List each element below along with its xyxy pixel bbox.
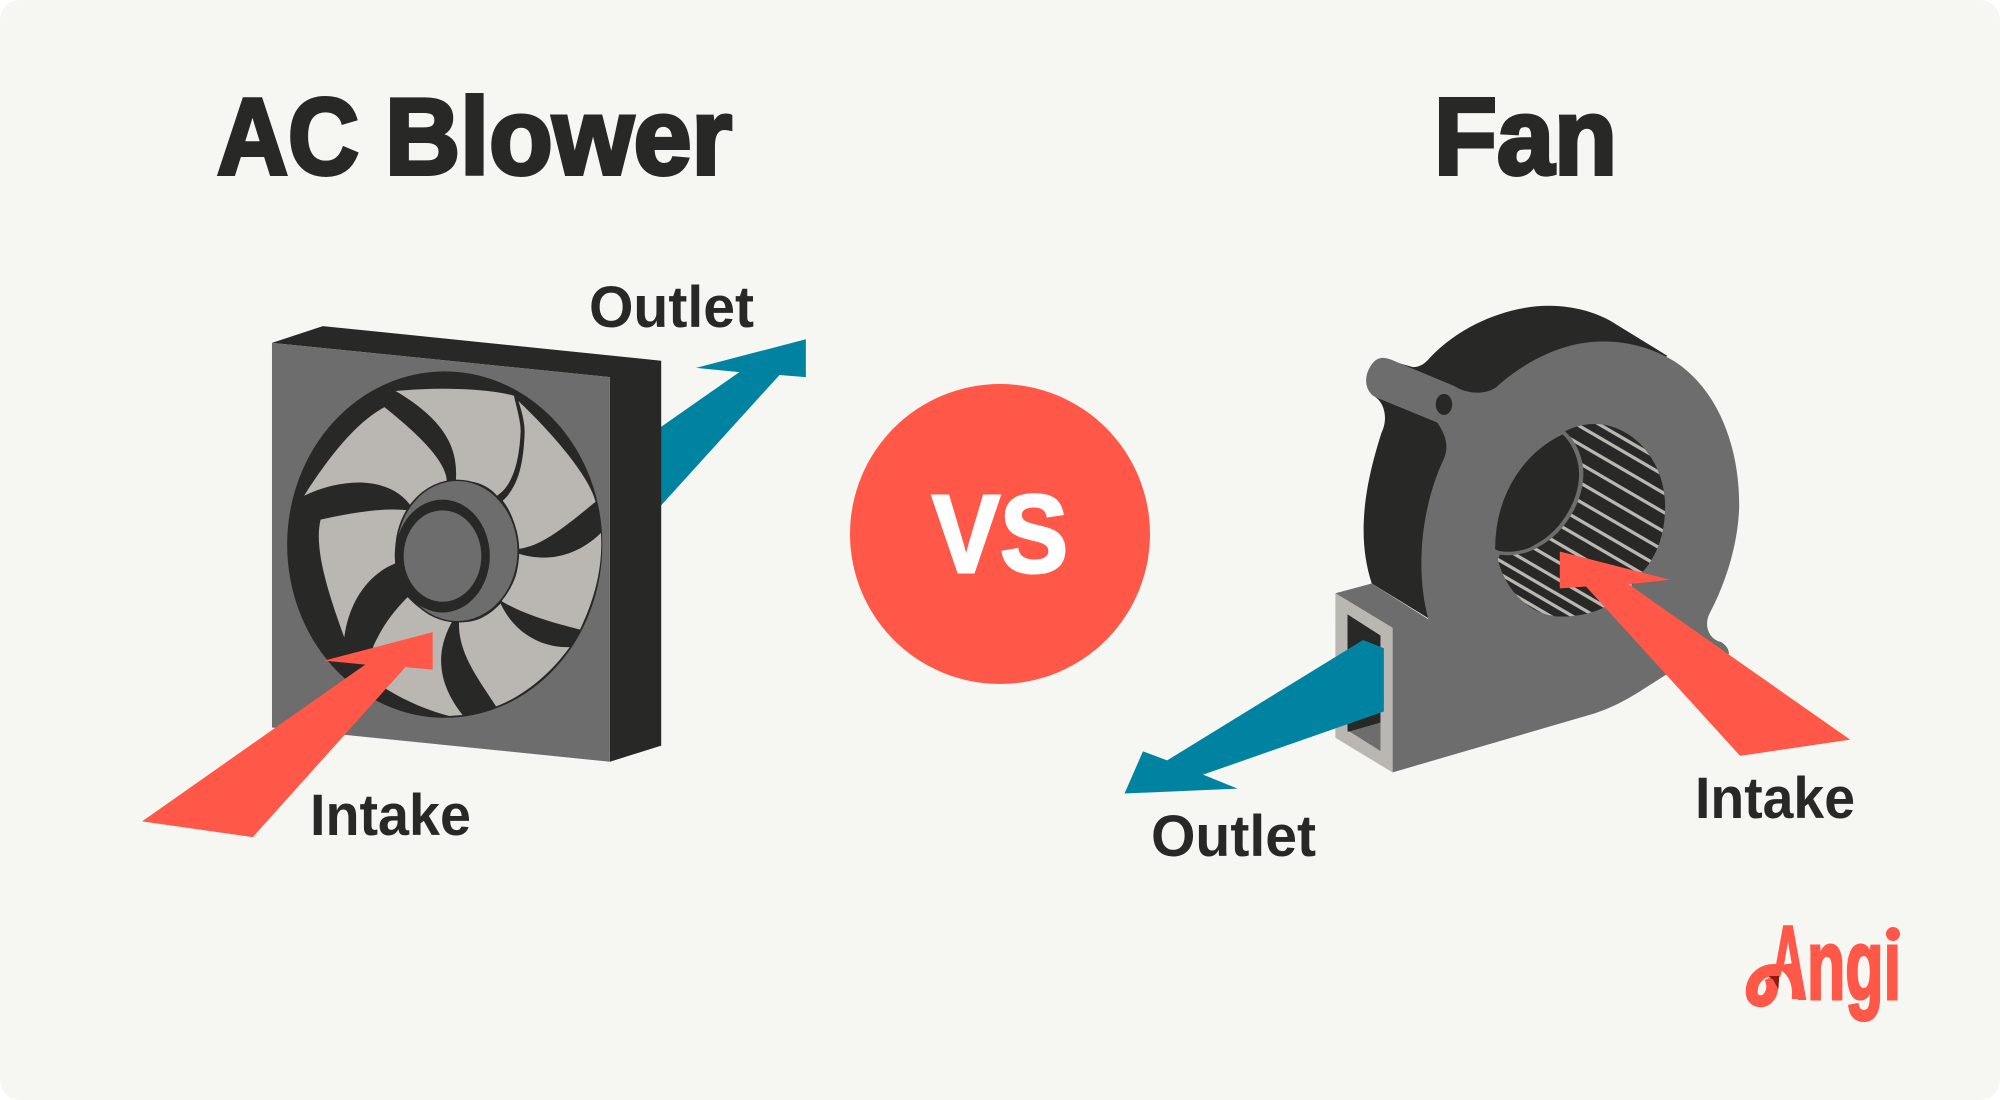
label: fan outlet: Outlet <box>1151 804 1316 869</box>
logo: Angi <box>1746 925 1900 1022</box>
diagram: centrifugal fan <box>1125 306 1850 793</box>
title: Fan: Fan <box>1434 76 1617 198</box>
fan blades <box>304 389 601 716</box>
label: blower intake: Intake <box>310 783 471 848</box>
title: AC Blower: Blower <box>385 76 732 198</box>
fan hub <box>395 480 518 622</box>
fan body front <box>1335 342 1739 772</box>
versus badge <box>850 384 1150 684</box>
logo swoosh <box>1752 963 1806 1001</box>
blower housing and fan <box>272 326 661 762</box>
arrow: fan intake <box>1560 552 1850 756</box>
diagram: AC blower <box>142 326 806 837</box>
label: blower outlet: Outlet <box>589 275 754 340</box>
title: AC Blower <box>217 76 732 198</box>
fan hub disc <box>1493 432 1581 553</box>
arrow: fan outlet <box>1125 640 1384 793</box>
outlet duct <box>1335 593 1393 772</box>
logo: Angi: ngi <box>1807 909 1901 1021</box>
logo dot <box>1886 927 1900 941</box>
arrow: blower outlet <box>643 339 806 525</box>
logo: Angi: A <box>1769 904 1807 1022</box>
housing side faces <box>272 326 661 762</box>
arrow: blower intake <box>142 632 433 837</box>
intake grille <box>1498 424 1666 616</box>
fan body rear <box>1364 306 1667 619</box>
fan opening <box>287 371 602 718</box>
label: fan intake: Intake <box>1695 766 1855 831</box>
title: AC Blower: AC <box>217 76 359 198</box>
versus badge: VS <box>932 473 1068 596</box>
logo dot mask <box>1880 918 1906 943</box>
housing front face <box>272 343 610 762</box>
mounting hole <box>1436 394 1452 415</box>
